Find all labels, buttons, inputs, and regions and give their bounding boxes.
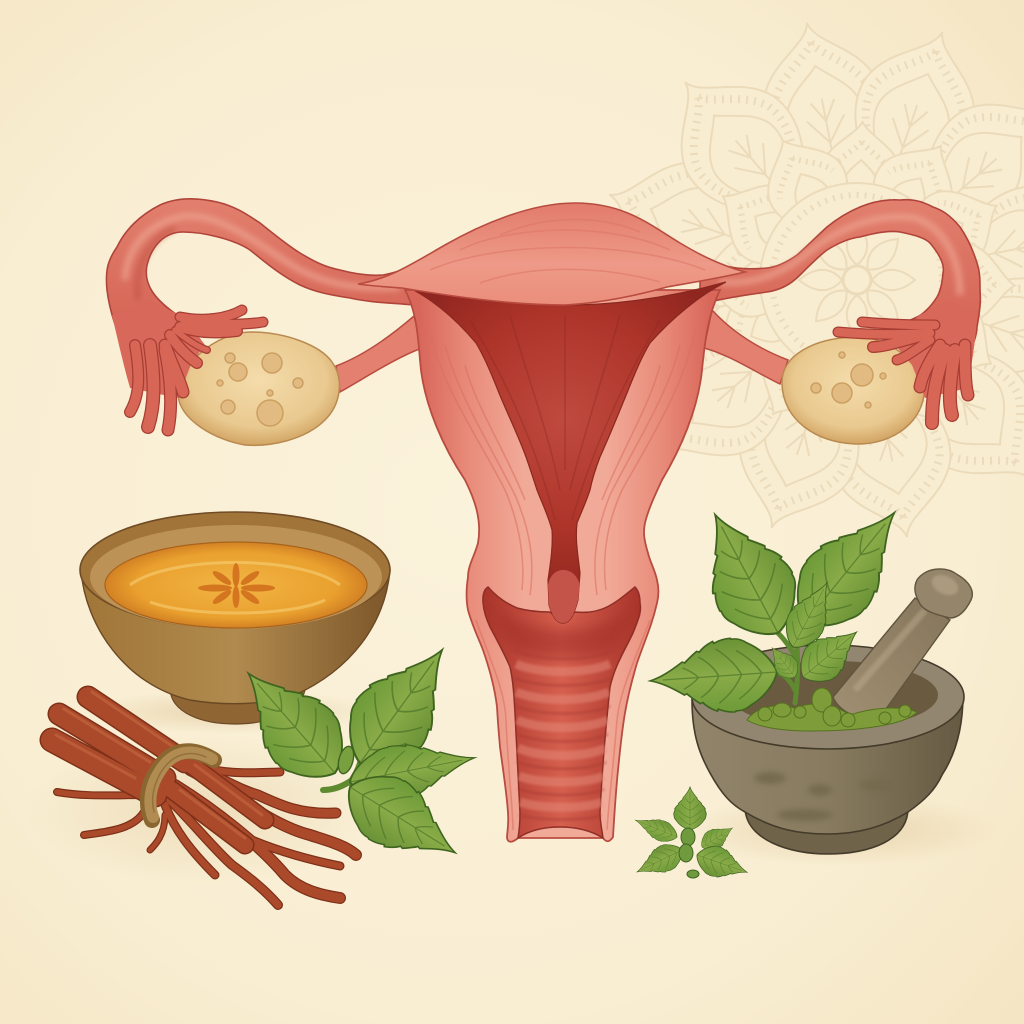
uterine fundus (358, 203, 745, 305)
mortar rim (692, 645, 964, 749)
floating flower (198, 563, 275, 608)
uterus (358, 203, 745, 842)
pestle (833, 569, 972, 718)
crushed herbs (747, 688, 917, 731)
golden liquid (105, 542, 367, 628)
left fallopian tube (106, 199, 435, 360)
right ovary (782, 337, 924, 444)
left ovarian ligament (336, 316, 422, 392)
mortar foot (745, 808, 908, 854)
uterus outer wall and vaginal wall (405, 290, 720, 842)
small basil sprig (631, 787, 752, 887)
mortar interior (730, 661, 938, 729)
right ovarian ligament (704, 310, 788, 384)
stone mortar (692, 569, 972, 854)
bowl foot (170, 690, 305, 724)
bowl body (81, 570, 390, 704)
left fimbriae (112, 300, 263, 430)
bowl rim (80, 512, 390, 628)
root tails (57, 765, 356, 905)
basil sprig by bowl (220, 626, 480, 882)
left ovary (178, 332, 339, 445)
mortar body (692, 695, 963, 834)
uterine cavity (402, 282, 726, 623)
bundle of roots (52, 692, 356, 905)
bowl shadow (80, 690, 380, 734)
bowl of golden liquid (80, 512, 390, 724)
right fallopian tube (700, 200, 980, 360)
root shadow (25, 735, 375, 885)
root tails outline (57, 765, 356, 905)
vaginal canal (483, 587, 641, 838)
cervix (548, 570, 580, 623)
mortar shadow (680, 794, 1000, 866)
right fimbriae (838, 300, 977, 423)
fundus fibres (430, 220, 705, 283)
mandala (588, 11, 1024, 549)
root binding twine (148, 751, 214, 820)
mortar speckles (754, 772, 900, 821)
thick root stems (52, 697, 265, 845)
wall fibres (430, 330, 695, 830)
basil plant in mortar (648, 489, 924, 718)
cavity fibres (470, 315, 660, 520)
